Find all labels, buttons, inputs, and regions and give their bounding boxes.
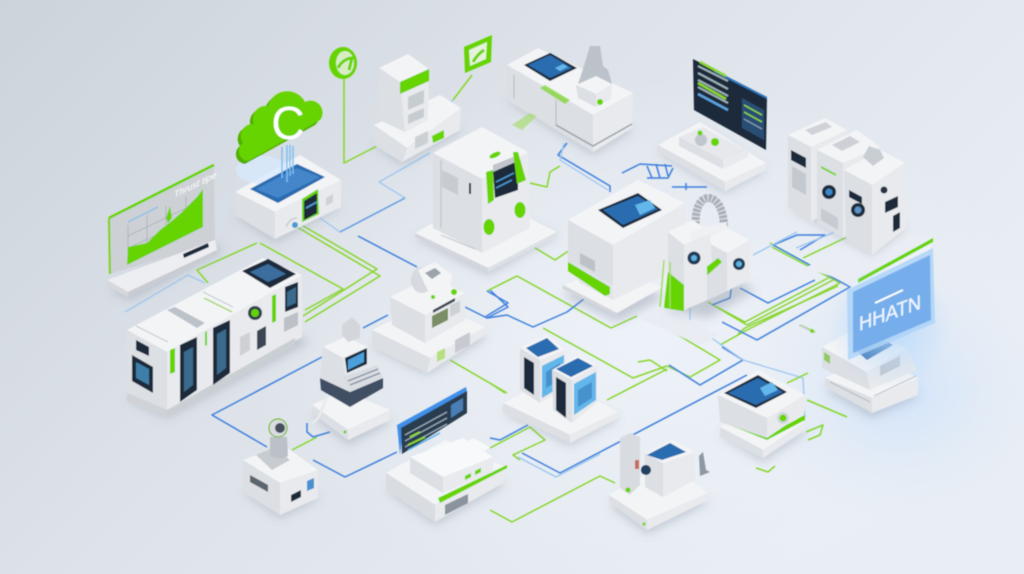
cloud data lines xyxy=(282,145,293,182)
machine: twin server towers xyxy=(503,335,620,446)
connecting wires xyxy=(125,75,850,522)
machine: valve assembly xyxy=(640,198,755,345)
machine: small base with dome camera xyxy=(243,419,320,518)
machine: centre kiosk xyxy=(415,127,558,275)
top fixture xyxy=(576,46,612,107)
arm xyxy=(620,433,640,495)
machine: control panel with dark monitor xyxy=(658,59,767,193)
top screen xyxy=(250,164,325,203)
screen xyxy=(598,193,662,228)
coil xyxy=(696,198,724,228)
left block xyxy=(668,220,710,245)
machine: large cabinet bank xyxy=(127,258,310,418)
top unit xyxy=(342,317,360,342)
machine: tower with green band xyxy=(374,54,462,165)
icon: green circle sign xyxy=(329,47,357,79)
round badge xyxy=(248,306,262,320)
tower one xyxy=(520,335,565,403)
machine: tablet and printer xyxy=(386,387,507,525)
hologram text: HHATN xyxy=(859,291,921,336)
green handles xyxy=(484,219,494,235)
blue hologram panel xyxy=(828,248,952,387)
tower two xyxy=(552,355,597,423)
right block xyxy=(703,228,750,253)
green strips xyxy=(170,348,175,374)
camera head xyxy=(411,262,457,299)
dark monitor xyxy=(693,59,767,150)
machine: camera turret on platform xyxy=(372,262,487,375)
small green accessory xyxy=(799,325,815,333)
dome camera xyxy=(269,419,288,459)
screen xyxy=(524,53,577,81)
machine: robot arm unit xyxy=(609,433,710,534)
machine: printer block with screen xyxy=(563,180,685,322)
machine: blue screen unit on green layer xyxy=(718,370,823,472)
machine: kiosk terminal xyxy=(312,317,392,445)
top screen xyxy=(242,259,296,288)
machine: three server towers with platform xyxy=(788,118,933,300)
machine: stacked layer unit xyxy=(822,330,920,418)
dark door panels xyxy=(180,337,197,402)
machine: cloud gateway base xyxy=(235,155,341,242)
machine: top centre unit with screen xyxy=(507,46,633,155)
icon: green square sign xyxy=(464,35,492,73)
door panel xyxy=(302,189,319,222)
tablet xyxy=(397,387,467,455)
tower one xyxy=(788,118,847,222)
chart panel xyxy=(107,165,225,300)
icon: green cloud: C xyxy=(271,97,305,149)
dark band xyxy=(320,378,383,407)
green cover xyxy=(664,258,722,311)
icon: green cloud xyxy=(236,91,323,164)
keyboard xyxy=(343,365,383,392)
vents and green strip xyxy=(568,262,610,296)
dark screen with brackets xyxy=(486,150,526,204)
left face screen xyxy=(132,355,153,393)
tower two xyxy=(817,130,880,238)
chart title: Thrust tipe xyxy=(174,170,216,201)
tower three xyxy=(844,146,906,255)
area chart xyxy=(127,189,203,265)
